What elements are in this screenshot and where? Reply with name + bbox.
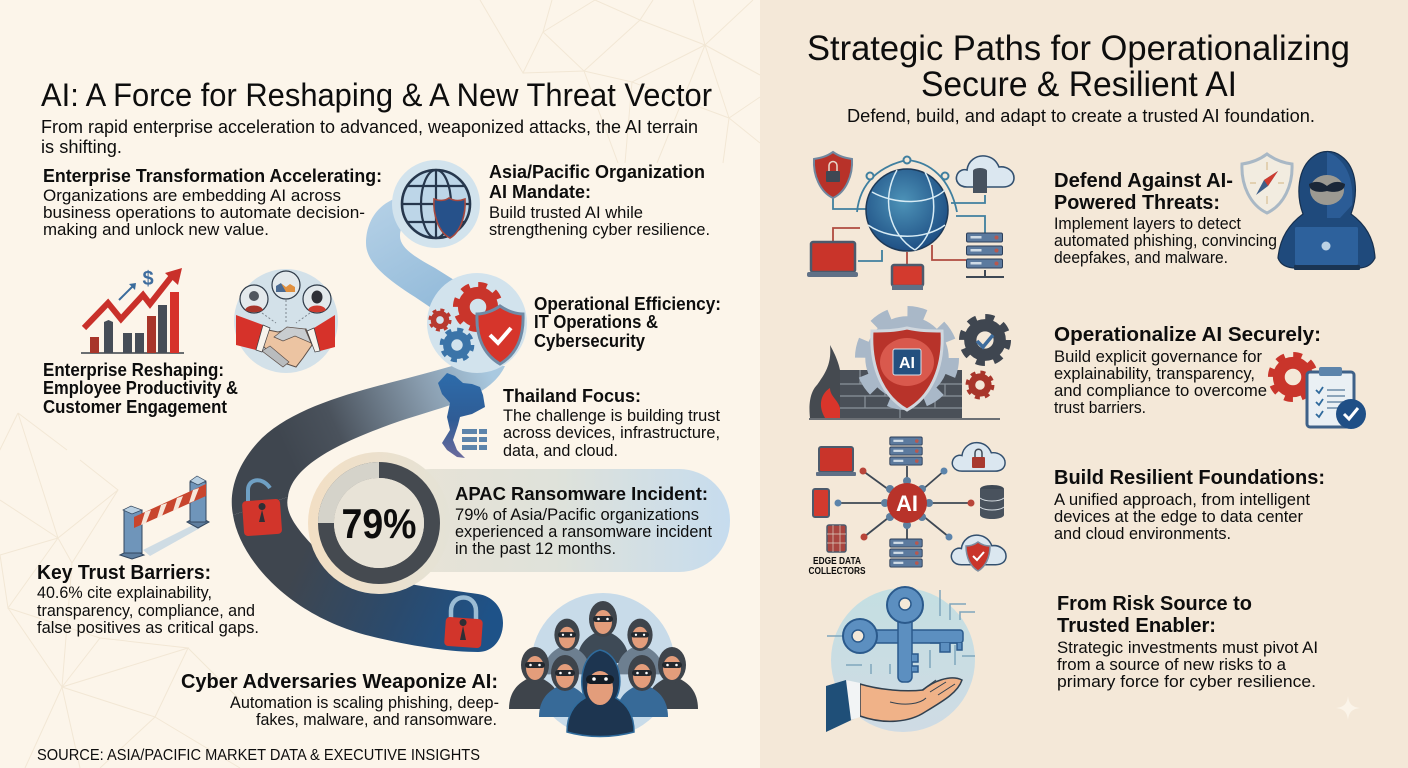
text block: asia pacific mandate: AI Mandate:	[489, 181, 591, 202]
text block: operational efficiency: Cybersecurity	[534, 330, 646, 351]
icon: closed padlock	[444, 598, 483, 648]
text block: build resilient foundations: devices at the edge to data center	[1054, 508, 1304, 526]
text block: enterprise reshaping	[43, 359, 238, 417]
text block: cyber adversaries: fakes, malware, and ransomware.	[256, 711, 497, 729]
text block: defend: Implement layers to detect	[1054, 215, 1241, 233]
text block: defend: Defend Against AI-	[1054, 170, 1233, 192]
text block: thailand focus: Thailand Focus:	[503, 385, 641, 406]
label: edge data collectors: EDGE DATA	[813, 555, 861, 567]
text block: thailand focus: across devices, infrastructure,	[503, 424, 720, 442]
icon: thailand map with servers	[438, 373, 487, 458]
text block: trusted enabler	[1057, 593, 1318, 691]
ribbon: upper light blue path	[366, 196, 470, 322]
icon: gears with shield	[427, 273, 527, 373]
text block: enterprise transformation: making and unlock new value.	[43, 221, 269, 239]
text block: thailand focus: data, and cloud.	[503, 442, 618, 460]
text block: thailand focus: The challenge is building trust	[503, 407, 720, 425]
subtitle: left	[41, 117, 698, 157]
text block: enterprise transformation: business operations to automate decision-	[43, 204, 365, 222]
callout: ransomware incident pill: in the past 12 months.	[455, 540, 616, 558]
text block: build resilient foundations: and cloud environments.	[1054, 525, 1231, 543]
text block: cyber adversaries: Cyber Adversaries Weaponize AI:	[181, 671, 498, 693]
subtitle: right: Defend, build, and adapt to create a trusted AI foundation.	[847, 106, 1315, 126]
icon: road barrier	[120, 476, 209, 559]
text block: operationalize: Build explicit governance for	[1054, 348, 1262, 366]
icon: AI hub network: AI	[896, 491, 918, 516]
text block: key trust barriers: transparency, compliance, and	[37, 602, 255, 620]
icon: keys over open hand	[826, 587, 975, 732]
icon: AI gear shield with firewall: AI	[899, 355, 915, 372]
donut chart: 79 percent	[326, 470, 432, 576]
title: left: AI: A Force for Reshaping & A New Threat Vector	[41, 77, 712, 113]
text block: asia pacific mandate: Build trusted AI while	[489, 204, 643, 222]
text block: key trust barriers	[37, 562, 259, 637]
icon: compass shield	[1242, 154, 1292, 213]
text block: enterprise reshaping: Customer Engagement	[43, 396, 227, 417]
text block: enterprise transformation	[43, 165, 382, 239]
icon: AI gear shield with firewall	[809, 313, 1008, 419]
text block: asia pacific mandate: strengthening cyber resilience.	[489, 221, 710, 239]
text block: thailand focus	[503, 385, 720, 460]
text block: enterprise transformation: Organizations are embedding AI across	[43, 187, 341, 205]
text block: trusted enabler: from a source of new risks to a	[1057, 656, 1287, 674]
text block: defend	[1054, 170, 1277, 267]
donut chart: 79 percent: 79%	[342, 500, 416, 547]
icon: hooded hacker at laptop	[1278, 152, 1375, 270]
source note: SOURCE: ASIA/PACIFIC MARKET DATA & EXECUTIVE INSIGHTS	[37, 747, 480, 764]
text block: defend: deepfakes, and malware.	[1054, 249, 1228, 267]
text block: build resilient foundations: A unified approach, from intelligent	[1054, 491, 1310, 509]
icon: growth chart	[81, 268, 184, 353]
panel: left background	[0, 0, 760, 768]
panel: right background	[760, 0, 1408, 768]
icon: global network	[807, 152, 1014, 290]
text block: build resilient foundations: Build Resilient Foundations:	[1054, 467, 1325, 489]
text block: enterprise transformation: Enterprise Transformation Accelerating:	[43, 165, 382, 186]
icon: group of hooded adversaries	[509, 593, 698, 737]
text block: operational efficiency: Operational Efficiency:	[534, 293, 721, 314]
callout: ransomware incident pill: APAC Ransomware Incident:	[455, 483, 708, 504]
text block: asia pacific mandate: Asia/Pacific Organization	[489, 161, 705, 182]
text block: defend: automated phishing, convincing	[1054, 232, 1277, 250]
text block: defend: Powered Threats:	[1054, 192, 1220, 214]
icon: growth chart: $	[142, 268, 154, 290]
text block: operational efficiency	[534, 293, 721, 351]
icon: AI hub network	[813, 437, 1006, 571]
icon: sparkle	[1336, 696, 1360, 720]
text block: operationalize	[1054, 324, 1321, 417]
callout: ransomware incident pill: experienced a ransomware incident	[455, 523, 712, 541]
text block: key trust barriers: false positives as critical gaps.	[37, 619, 259, 637]
icon: globe with shield	[392, 160, 480, 248]
text block: operationalize: and compliance to overcome	[1054, 382, 1267, 400]
text block: asia pacific mandate	[489, 161, 710, 239]
text block: trusted enabler: From Risk Source to	[1057, 593, 1252, 615]
text block: trusted enabler: Strategic investments must pivot AI	[1057, 639, 1318, 657]
text block: build resilient foundations	[1054, 467, 1325, 543]
text block: trusted enabler: Trusted Enabler:	[1057, 615, 1216, 637]
text block: operationalize: explainability, transparency,	[1054, 365, 1255, 383]
title: right	[807, 29, 1350, 104]
icon: handshake with people	[234, 269, 338, 373]
callout: ransomware incident pill	[308, 452, 730, 594]
title: right: Strategic Paths for Operationalizing	[807, 29, 1350, 68]
title: right: Secure & Resilient AI	[921, 65, 1237, 104]
text block: enterprise reshaping: Enterprise Reshaping:	[43, 359, 224, 380]
ribbon: dark curving path	[232, 366, 505, 652]
callout: ransomware incident pill: 79% of Asia/Pacific organizations	[455, 506, 699, 524]
text block: key trust barriers: 40.6% cite explainability,	[37, 584, 212, 602]
label: edge data collectors: COLLECTORS	[808, 565, 866, 577]
text block: key trust barriers: Key Trust Barriers:	[37, 562, 211, 584]
text block: cyber adversaries: Automation is scaling phishing, deep-	[230, 694, 499, 712]
text block: operationalize: Operationalize AI Securely:	[1054, 324, 1321, 346]
subtitle: left: From rapid enterprise acceleration to advanced, weaponized attacks, the AI terrain	[41, 117, 698, 137]
icon: gear and checklist	[1271, 355, 1366, 429]
text block: enterprise reshaping: Employee Productivity &	[43, 377, 238, 398]
text block: operational efficiency: IT Operations &	[534, 311, 658, 332]
text block: operationalize: trust barriers.	[1054, 399, 1146, 417]
label: edge data collectors	[808, 555, 866, 577]
text block: cyber adversaries	[181, 671, 499, 729]
icon: open padlock	[242, 480, 282, 536]
text block: trusted enabler: primary force for cyber resilience.	[1057, 673, 1316, 691]
subtitle: left: is shifting.	[41, 137, 122, 157]
